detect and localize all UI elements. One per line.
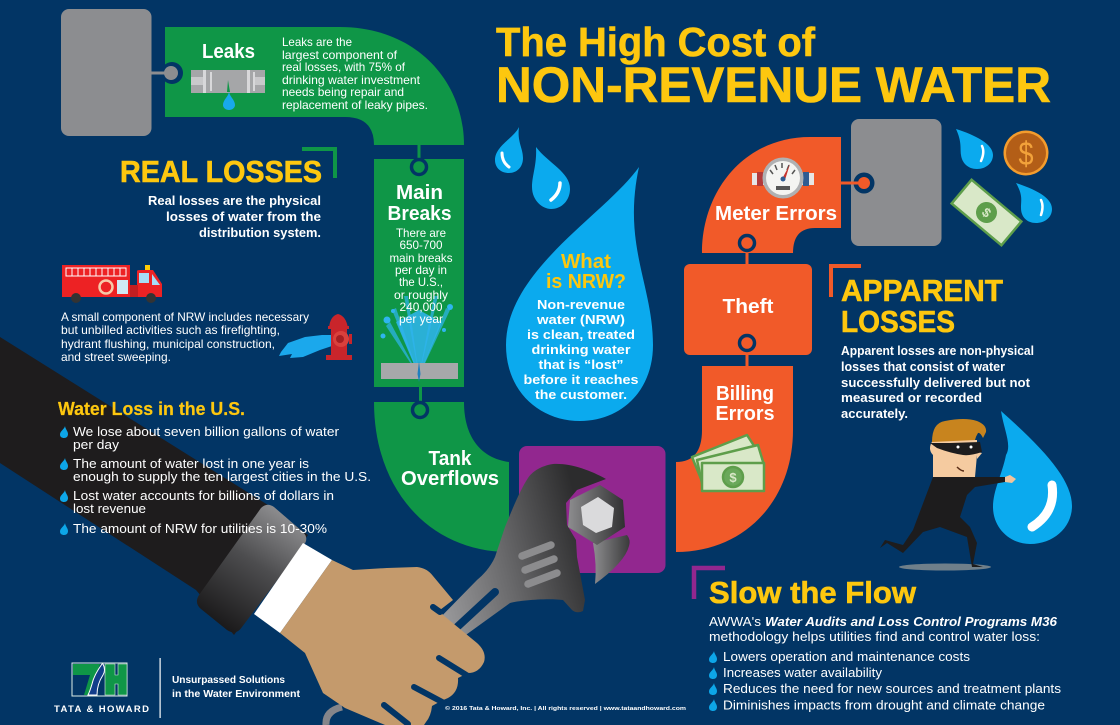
text: real losses description: Real losses are the physical [148,193,321,208]
text: NRW definition: is clean, treated [527,327,635,342]
list: slow the flow benefits: Increases water availability [723,665,882,680]
text: slow the flow intro: AWWA's [709,614,762,629]
title: NON-REVENUE WATER [496,57,1051,113]
hook end [326,707,342,725]
text: NRW definition: that is “lost” [538,357,624,372]
list: water loss facts: enough to supply the ten largest cities in the U.S. [73,469,371,484]
wrench grip lines [522,545,557,584]
list: water loss facts: Lost water accounts for billions of dollars in [73,488,334,503]
panel: tank overflows pipe: Overflows [401,468,499,490]
text: unbilled activities [61,310,309,364]
heading: meter errors: Meter Errors [715,203,837,225]
list: water loss facts: The amount of NRW for utilities is 10-30% [73,521,327,536]
lower jaw [593,535,630,584]
heading: main breaks: Main [396,182,443,204]
title [496,19,1051,113]
icon: water burst [380,296,458,382]
panel: purple tank [519,446,666,573]
text: unbilled activities: but unbilled activities such as firefighting, [61,323,280,337]
text: leaks description [282,35,428,112]
panel: main breaks pipe [374,144,464,387]
text: main breaks description: or roughly [394,288,448,302]
text: apparent losses description: losses that consist of water [841,359,1005,374]
text: leaks description: real losses, with 75% of [282,60,406,74]
icon: water meter gauge [752,158,814,198]
text: main breaks description: 650-700 [400,238,443,252]
text: leaks description: largest component of [282,48,398,62]
text: leaks description: Leaks are the [282,35,352,49]
text: tagline [172,675,301,700]
panel: what is NRW drop: is NRW? [546,271,626,293]
list: water loss facts: per day [73,437,120,452]
connector: leaks to main breaks [412,144,426,174]
text: tagline: Unsurpassed Solutions [172,675,285,686]
heading: billing errors: Billing [716,383,774,405]
list: slow the flow benefits [709,649,1062,712]
icon: thief with water drop [880,411,1072,570]
text: leaks description: replacement of leaky pipes. [282,98,428,112]
panel: main breaks pipe: Breaks [388,203,452,225]
panel: what is NRW drop [506,167,653,421]
arm and sleeve [0,337,332,635]
text: NRW definition: drinking water [532,342,630,357]
head [930,440,977,477]
icon: coin: $ [1018,135,1034,172]
concrete slab [381,363,458,379]
text: main breaks description: per day in [395,263,447,277]
text: real losses description: distribution system. [199,225,321,240]
list: water loss facts: The amount of water lost in one year is [73,456,310,471]
list: slow the flow benefits: Reduces the need for new sources and treatment plants [723,681,1062,696]
wrench head and handle [430,464,606,650]
text: unbilled activities: and street sweeping. [61,350,171,364]
text: NRW definition: water (NRW) [536,312,625,327]
text: NRW definition [524,297,638,402]
hand [1005,475,1016,483]
icon: water drop 3 [956,129,993,169]
list: slow the flow benefits: Diminishes impacts from drought and climate change [723,698,1045,712]
text: main breaks description: per year [399,312,443,326]
panel: tank overflows pipe [374,386,509,552]
text: slow the flow intro: Water Audits and Loss Control Programs M36 [765,614,1058,629]
text: slow the flow intro: methodology helps utilities find and control water loss: [709,629,1040,644]
list: water loss facts [60,424,371,536]
text: apparent losses description: measured or recorded [841,390,982,405]
panel: gray tank left [61,9,152,136]
panel: billing errors pipe: Errors [716,403,774,425]
shadow [899,564,991,570]
icon: dollar bill: $ [979,204,995,221]
text: apparent losses description: Apparent losses are non-physical [841,343,1034,358]
text: apparent losses description: successfully delivered but not [841,375,1031,390]
icon: wrench [326,464,630,725]
heading: apparent losses: APPARENT [841,273,1003,308]
panel: leaks pipe [150,27,464,145]
nut [568,485,625,545]
heading: theft: Theft [722,296,774,318]
icon: stack of bills: $ [729,470,737,485]
heading: real losses: REAL LOSSES [120,154,322,189]
icon: fire truck [62,265,162,303]
heading: leaks: Leaks [202,41,255,63]
heading: water loss in the U.S.: Water Loss in the U.S. [58,399,245,419]
mask [930,442,982,455]
hair [932,419,986,442]
logo: Tata & Howard [54,663,149,715]
text: leaks description: needs being repair and [282,85,404,99]
connector: main breaks to tank [412,386,428,418]
divider [160,658,161,718]
panel: gray tank right [851,119,942,246]
icon: water drop 4 [1016,183,1052,223]
heading: apparent losses: LOSSES [841,304,955,339]
text: apparent losses description [841,343,1034,421]
heading: what is NRW: What [561,251,611,273]
handle slot [455,592,495,629]
icon: water drop 2 [532,147,570,209]
icon: dollar bill [952,180,1021,245]
panel: billing errors pipe [676,336,793,552]
text: main breaks description: There are [396,226,446,240]
icon: stack of bills [692,435,764,491]
text: unbilled activities: A small component of NRW includes necessary [61,310,309,324]
list: water loss facts: We lose about seven billion gallons of water [73,424,340,439]
body [880,477,1005,567]
shirt cuff [254,543,332,633]
text: NRW definition: Non-revenue [537,297,625,312]
heading: apparent losses [831,266,1003,339]
text: main breaks description: the U.S., [399,275,443,289]
sleeve cuff [197,505,306,632]
connector: tank to leaks [150,62,183,84]
stolen drop [993,411,1072,544]
text: copyright: © 2016 Tata & Howard, Inc. | All rights reserved | www.tataandhoward.com [445,705,686,712]
heading: tank overflows: Tank [428,448,472,470]
text: real losses description: losses of water from the [166,209,321,224]
list: water loss facts: lost revenue [73,501,146,516]
text: NRW definition: before it reaches [524,372,638,387]
text: NRW definition: the customer. [535,387,627,402]
title: The High Cost of [496,19,815,65]
text: main breaks description: 240,000 [400,300,443,314]
text: leaks description: drinking water investment [282,73,421,87]
panel: theft [684,236,812,355]
icon: fire hydrant with spray [279,314,352,360]
connector: meter to tank [840,172,874,194]
icon: coin [1004,130,1048,176]
connector: theft to billing [740,336,754,367]
logo: Tata & Howard: TATA & HOWARD [54,704,149,715]
text: real losses description [148,193,321,240]
text: slow the flow intro [709,614,1058,644]
list: slow the flow benefits: Lowers operation and maintenance costs [723,649,971,664]
heading: slow the flow: Slow the Flow [709,575,917,610]
connector: meter to theft [740,236,754,265]
panel: meter errors pipe [702,137,874,253]
text: main breaks description [390,226,452,326]
icon: water drop 1 [495,127,523,173]
text: apparent losses description: accurately. [841,406,908,421]
icon: hand [280,560,485,725]
text: tagline: in the Water Environment [172,689,301,700]
icon: leaky pipe [191,70,265,110]
text: unbilled activities: hydrant flushing, municipal construction, [61,337,275,351]
text: main breaks description: main breaks [390,251,452,265]
